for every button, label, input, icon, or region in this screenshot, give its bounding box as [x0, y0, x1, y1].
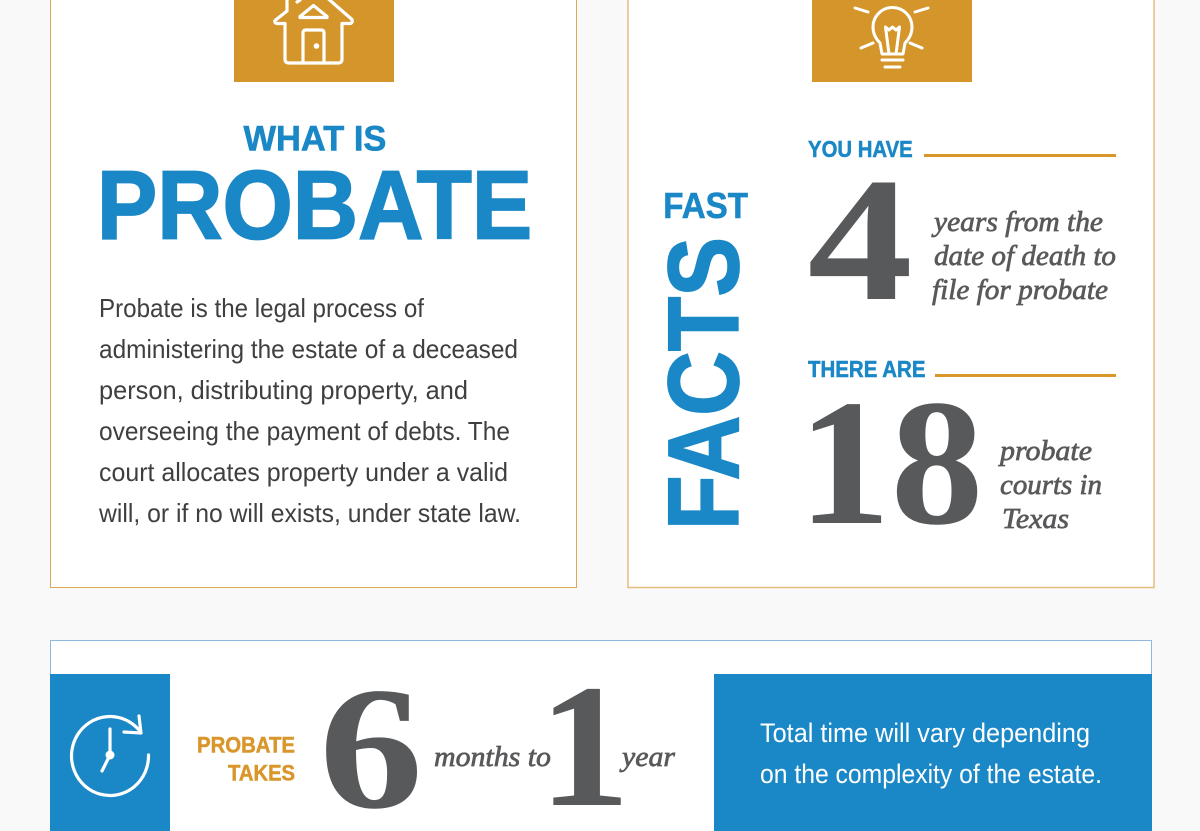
number: 18: 18: [798, 362, 983, 562]
text block: probate courts in texas: courts in: [1000, 470, 1102, 501]
fact: there are 18 courts: [798, 356, 1102, 562]
callout: total time varies: Total time will vary depending: [760, 718, 1090, 748]
text block: probate definition: overseeing the payment of debts. The: [99, 416, 510, 446]
text block: years from the date of death: years from the: [931, 207, 1103, 238]
text: year: year: [619, 742, 675, 773]
panel: what is probate: [50, 0, 576, 588]
icon: clock on blue square: [50, 674, 170, 831]
text block: probate definition: [98, 293, 521, 528]
heading: what is: WHAT IS: [244, 120, 386, 159]
text block: probate definition: person, distributing property, and: [99, 375, 468, 405]
text block: probate definition: administering the estate of a deceased: [99, 334, 518, 364]
icon: house on gold square: [234, 0, 394, 82]
number: 4: 4: [808, 143, 913, 338]
callout: total time varies: on the complexity of the estate.: [760, 759, 1102, 789]
panel: probate timeline: [50, 640, 1152, 831]
fact: you have 4 years: [808, 136, 1116, 338]
text block: probate definition: court allocates property under a valid: [99, 457, 508, 487]
label: there are: THERE ARE: [808, 356, 925, 382]
text block: years from the date of death: [931, 207, 1116, 306]
label: probate takes: [197, 734, 295, 786]
heading: facts rotated: FACTS: [648, 237, 760, 530]
label: you have: YOU HAVE: [808, 136, 913, 162]
text block: probate courts in texas: probate: [998, 436, 1092, 467]
heading: probate: PROBATE: [97, 151, 532, 259]
label: probate takes: TAKES: [228, 762, 295, 786]
text: months to: months to: [434, 742, 551, 773]
icon: light bulb on gold square: [812, 0, 972, 82]
label: probate takes: PROBATE: [197, 734, 295, 758]
callout: total time varies: [714, 674, 1152, 831]
text block: probate definition: will, or if no will exists, under state law.: [98, 498, 521, 528]
text block: probate courts in texas: Texas: [1002, 504, 1069, 535]
text block: years from the date of death: file for probate: [932, 275, 1108, 306]
text block: years from the date of death: date of death to: [934, 241, 1116, 272]
heading: fast: FAST: [663, 187, 748, 226]
text block: probate courts in texas: [998, 436, 1102, 535]
text block: probate definition: Probate is the legal process of: [99, 293, 425, 323]
panel: fast facts: [628, 0, 1154, 588]
